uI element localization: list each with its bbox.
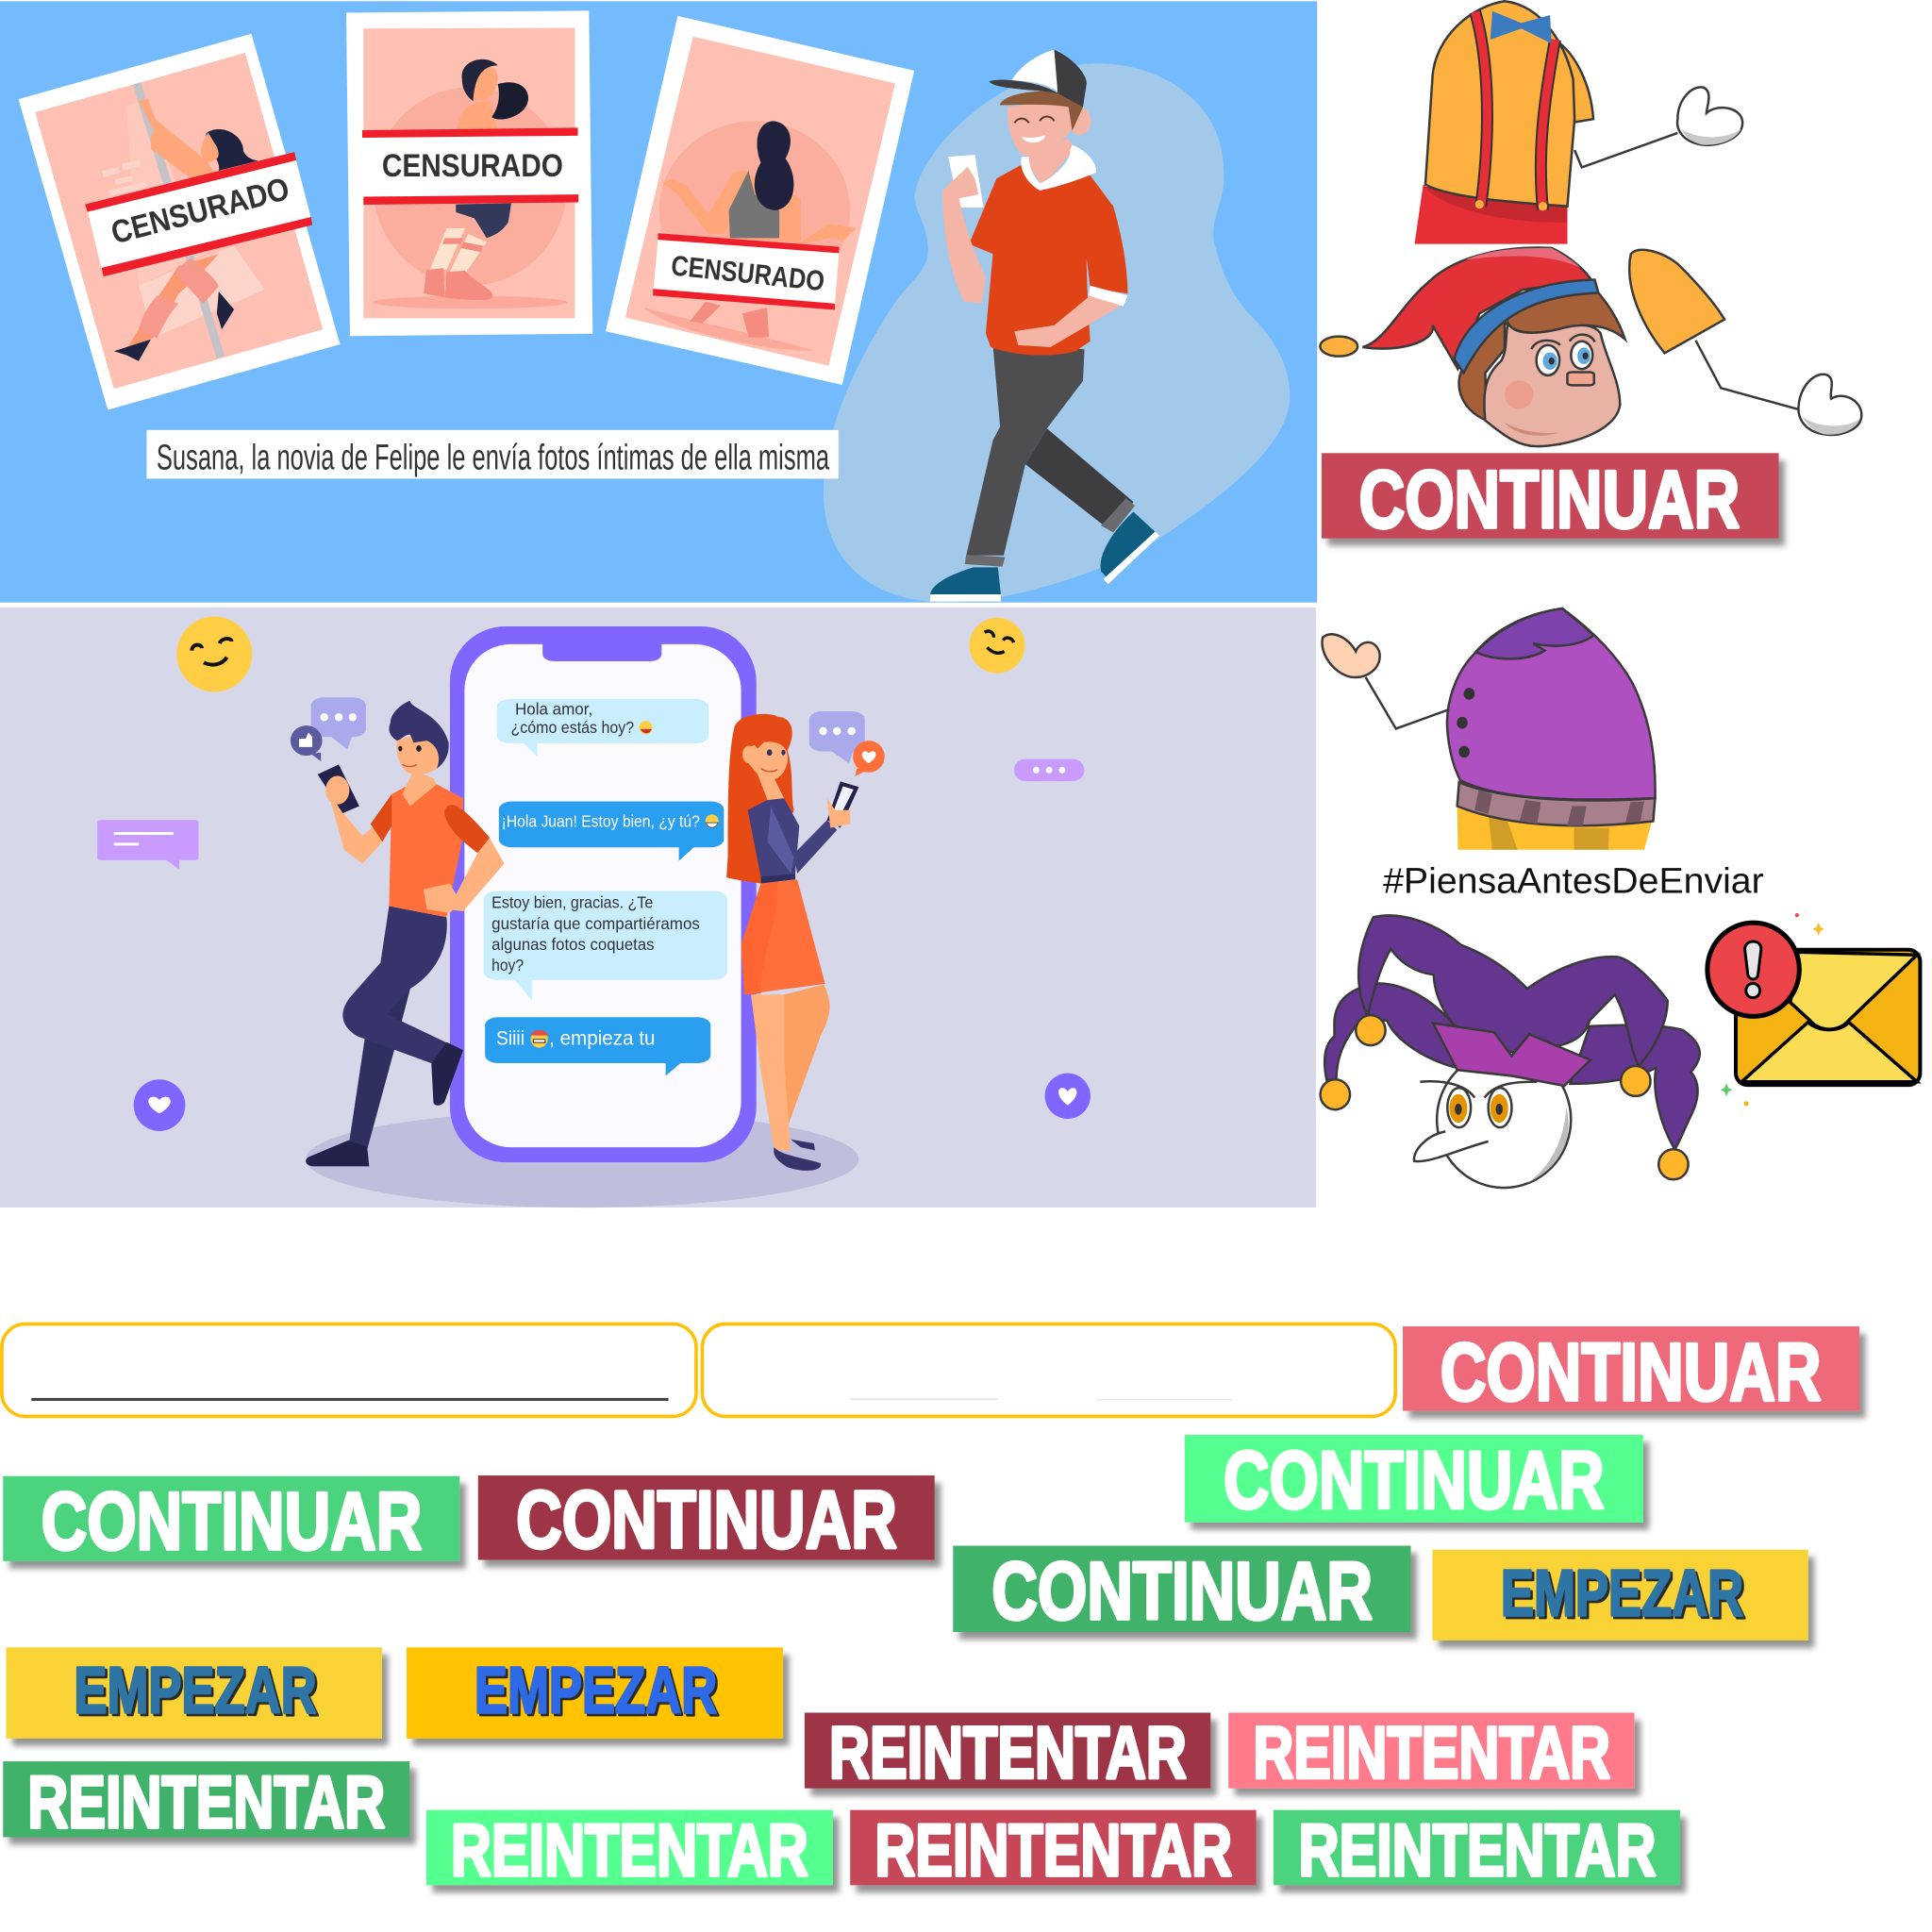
- message 1: Hola amor,: [515, 700, 592, 719]
- button: continuar maroon: CONTINUAR: [516, 1474, 897, 1565]
- button: reintentar dark green: REINTENTAR: [27, 1760, 385, 1843]
- label: censurado 3: CENSURADO: [670, 250, 826, 297]
- button: continuar crimson: CONTINUAR: [1359, 455, 1740, 545]
- input box 1: [2, 1324, 696, 1416]
- button: continuar mint: CONTINUAR: [1224, 1436, 1605, 1526]
- button: empezar yellow left: [7, 1647, 382, 1739]
- button: empezar amber: [407, 1647, 783, 1739]
- button: continuar pink: CONTINUAR: [1441, 1327, 1821, 1418]
- button: reintentar crimson: REINTENTAR: [874, 1808, 1232, 1891]
- button: reintentar pink: REINTENTAR: [1253, 1711, 1610, 1794]
- icon: alert envelope: [1707, 913, 1920, 1106]
- button: continuar dark green: CONTINUAR: [991, 1546, 1373, 1637]
- typing pill: [1014, 759, 1084, 781]
- button: continuar green: CONTINUAR: [42, 1476, 422, 1567]
- photo: woman with shorts: [346, 10, 592, 336]
- label: censurado 2: CENSURADO: [382, 148, 563, 184]
- photo: woman on pole: [19, 34, 340, 409]
- character: jester head: [1321, 915, 1700, 1188]
- message 3: [491, 893, 700, 974]
- illustration: man with phone: [824, 50, 1290, 602]
- panel: blue sexting scene: [0, 1, 1317, 603]
- hashtag: #PiensaAntesDeEnviar: [1383, 861, 1764, 901]
- character: clown head and hand: [1320, 248, 1861, 446]
- photo: woman from behind: [606, 16, 914, 385]
- message 4: , empieza tu: [549, 1028, 655, 1050]
- message 3: algunas fotos coquetas: [491, 935, 655, 954]
- character: purple torso with hand: [1323, 608, 1656, 850]
- panel: chat scene: [0, 608, 1316, 1208]
- button: reintentar mint: REINTENTAR: [451, 1808, 808, 1891]
- message 3: gustaría que compartiéramos: [491, 914, 700, 933]
- caption strip: [146, 430, 839, 478]
- message 2: ¡Hola Juan! Estoy bien, ¿y tú?: [502, 811, 700, 830]
- message 4: [496, 1028, 655, 1050]
- message 1: [511, 700, 634, 737]
- scene art: [97, 616, 1024, 1208]
- message 3: hoy?: [491, 956, 524, 974]
- input box 2: [702, 1324, 1395, 1416]
- character: clown torso with glove: [1414, 1, 1742, 244]
- caption strip: Susana, la novia de Felipe le envía fotos íntimas de ella misma: [157, 439, 830, 478]
- message 1: ¿cómo estás hoy?: [511, 718, 634, 737]
- label: censurado 1: CENSURADO: [108, 171, 293, 251]
- button: empezar amber: EMPEZAR: [475, 1654, 717, 1727]
- button: reintentar green: REINTENTAR: [1299, 1808, 1656, 1891]
- button: empezar yellow left: EMPEZAR: [74, 1654, 317, 1727]
- message 4: Siiii: [496, 1028, 525, 1050]
- button: empezar yellow right: EMPEZAR: [1501, 1556, 1743, 1629]
- heart badge: [1045, 1074, 1091, 1119]
- message 3: Estoy bien, gracias. ¿Te: [491, 893, 653, 912]
- button: reintentar maroon: REINTENTAR: [829, 1711, 1187, 1794]
- button: empezar yellow right: [1432, 1550, 1808, 1641]
